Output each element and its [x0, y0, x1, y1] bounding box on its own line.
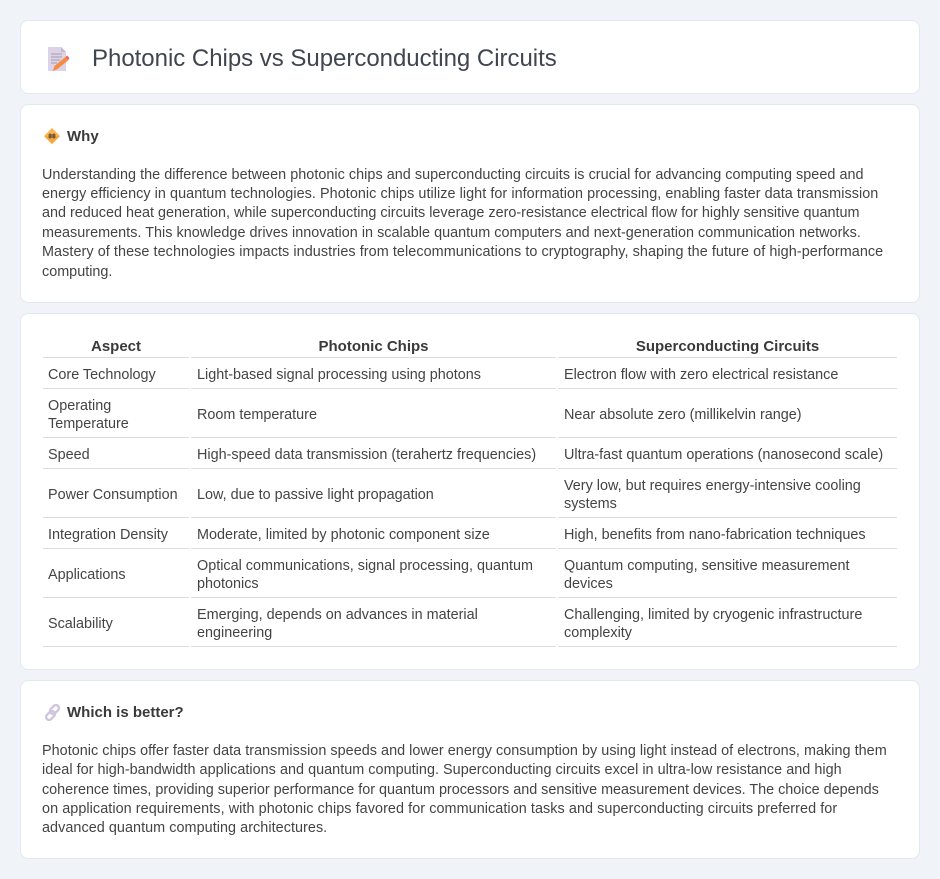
text block: why paragraph: measurements. This knowledge drives innovation in scalable quantum computers and next-generation communication networks.	[42, 225, 861, 241]
table rows: photonics	[197, 576, 259, 592]
table rows: systems	[564, 496, 617, 512]
table rows: Emerging, depends on advances in material	[197, 607, 478, 623]
text block: why paragraph: Understanding the difference between photonic chips and superconducting circuits is crucial for advancing computing speed and	[42, 167, 864, 183]
table rows: Room temperature	[197, 407, 317, 423]
text block: why paragraph: energy efficiency in quantum technologies. Photonic chips utilize light for information processing, enabling faster data transmission	[42, 186, 878, 202]
table header: Aspect	[91, 338, 141, 355]
panel: which is better	[20, 680, 920, 859]
panel: comparison table	[20, 313, 920, 670]
title: Photonic Chips vs Superconducting Circuits	[92, 45, 557, 72]
text block: verdict paragraph: ideal for high-bandwidth applications and quantum computing. Superconducting circuits excel in ultra-low resistance and high	[42, 762, 842, 778]
icon: memo	[48, 47, 70, 71]
table header: Photonic Chips	[318, 338, 428, 355]
table rows: engineering	[197, 625, 272, 641]
table header	[91, 338, 819, 355]
panel: why	[20, 104, 920, 303]
table rows: Electron flow with zero electrical resistance	[564, 367, 838, 383]
table rows	[43, 357, 897, 647]
table header: Superconducting Circuits	[636, 338, 819, 355]
table rows: Quantum computing, sensitive measurement	[564, 558, 850, 574]
text block: why paragraph: Mastery of these technologies impacts industries from telecommunications to cryptography, shaping the future of high-performance	[42, 244, 883, 260]
table rows: Optical communications, signal processing, quantum	[197, 558, 533, 574]
table rows: Ultra-fast quantum operations (nanosecond scale)	[564, 447, 883, 463]
table rows: devices	[564, 576, 613, 592]
text block: verdict paragraph: Photonic chips offer faster data transmission speeds and lower energy consumption by using light instead of electrons, making them	[42, 743, 887, 759]
panel: title card	[20, 20, 920, 94]
icon: link	[44, 704, 60, 721]
table rows: Speed	[48, 447, 90, 463]
table rows: Temperature	[48, 416, 129, 432]
text block: verdict paragraph: on application requirements, with photonic chips favored for communication tasks and superconducting circuits preferred for	[42, 801, 837, 817]
text block: why paragraph: and reduced heat generation, while superconducting circuits leverage zero-resistance electrical flow for highly sensitive quantum	[42, 205, 860, 221]
table rows: Scalability	[48, 616, 113, 632]
table rows: Moderate, limited by photonic component size	[197, 527, 490, 543]
icon: diamond sign	[44, 128, 60, 144]
table rows: Integration Density	[48, 527, 168, 543]
text block: why paragraph	[42, 167, 883, 280]
table rows: Operating	[48, 398, 111, 414]
heading: why: Why	[67, 128, 99, 145]
table rows: Low, due to passive light propagation	[197, 487, 434, 503]
heading: which is better: Which is better?	[67, 704, 184, 721]
table rows: Applications	[48, 567, 126, 583]
text block: why paragraph: computing.	[42, 264, 112, 280]
table rows: Challenging, limited by cryogenic infrastructure	[564, 607, 862, 623]
text block: verdict paragraph: advanced quantum computing architectures.	[42, 820, 327, 836]
table rows: complexity	[564, 625, 632, 641]
table rows: Power Consumption	[48, 487, 178, 503]
table rows: Very low, but requires energy-intensive cooling	[564, 478, 861, 494]
text block: verdict paragraph: coherence times, providing superior performance for quantum processors and sensitive measurement devices. The choice depends	[42, 782, 879, 798]
table rows: High-speed data transmission (terahertz frequencies)	[197, 447, 536, 463]
table rows: High, benefits from nano-fabrication techniques	[564, 527, 866, 543]
table rows: Near absolute zero (millikelvin range)	[564, 407, 802, 423]
table rows: Core Technology	[48, 367, 156, 383]
table rows: Light-based signal processing using photons	[197, 367, 481, 383]
text block: verdict paragraph	[42, 743, 887, 836]
